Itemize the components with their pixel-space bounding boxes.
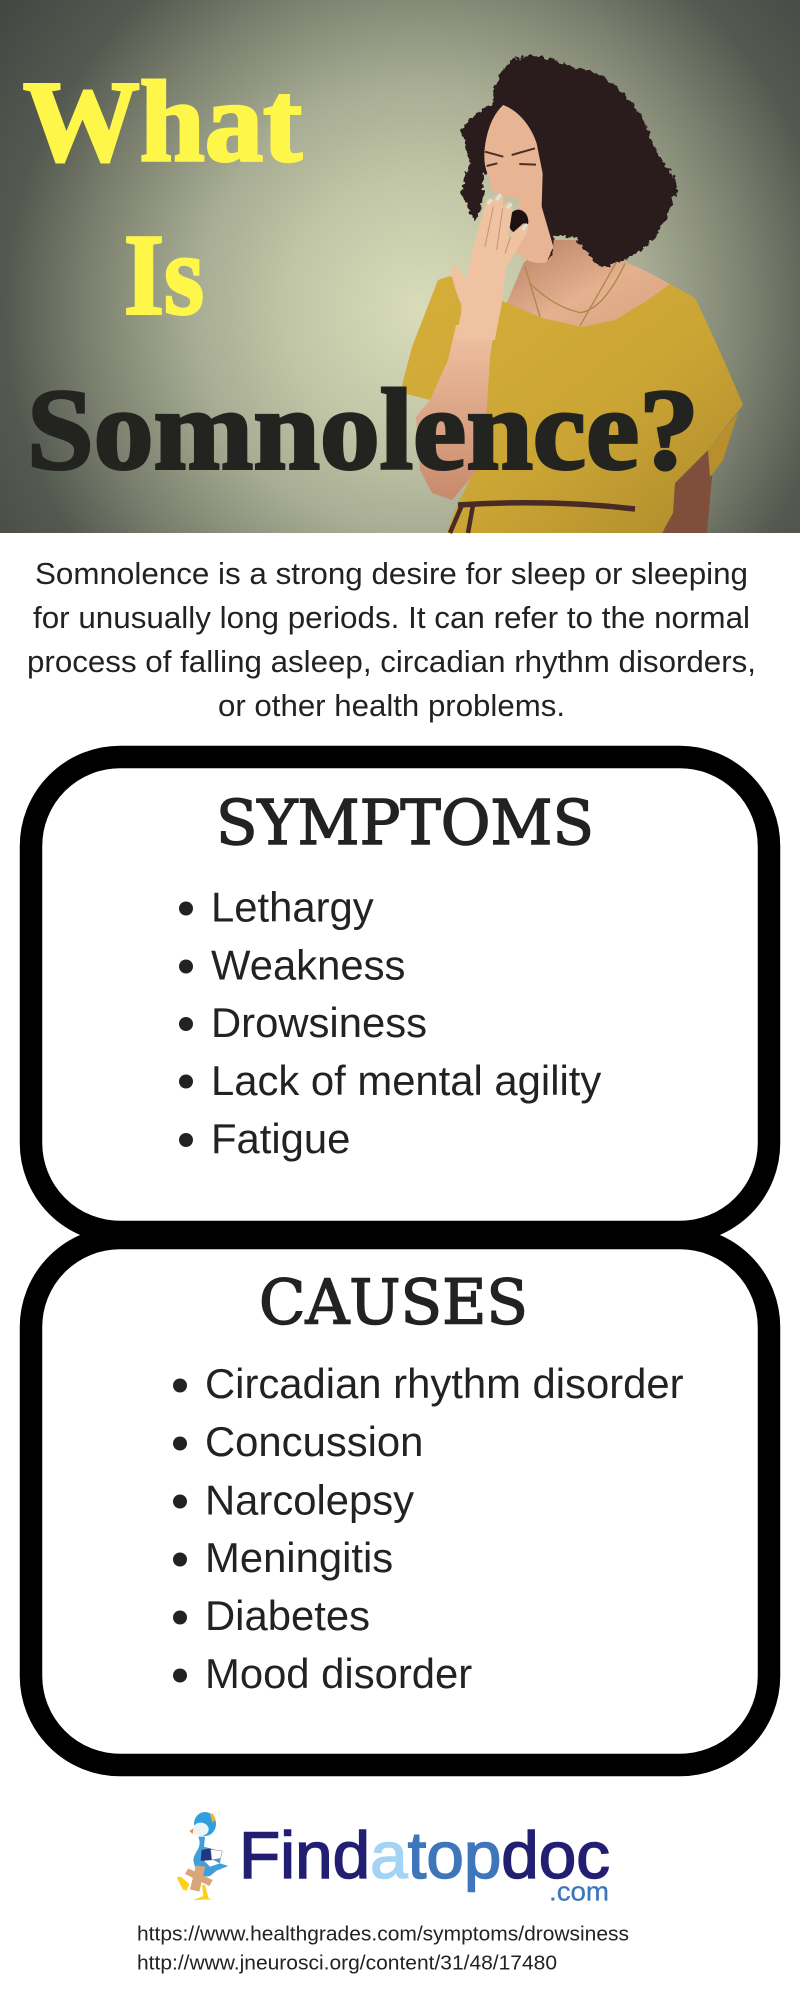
list of symptoms: Weakness (211, 942, 405, 988)
source links: https://www.healthgrades.com/symptoms/drowsiness (137, 1924, 629, 1946)
list of symptoms: Drowsiness (211, 999, 427, 1046)
logo: Findatopdoc (177, 1812, 610, 1906)
icon: duck mascot (177, 1812, 228, 1900)
causes box (31, 1238, 769, 1765)
right arm (663, 450, 712, 533)
list of causes: Mood disorder (205, 1650, 472, 1697)
intro paragraph (27, 556, 756, 723)
symptoms box (31, 757, 769, 1232)
wordmark suffix: .com (549, 1876, 609, 1906)
intro paragraph: Somnolence is a strong desire for sleep or sleeping (35, 556, 748, 591)
wordmark: Findatopdoc (239, 1818, 610, 1892)
title: What: What (23, 58, 302, 186)
list of causes: Meningitis (205, 1534, 393, 1581)
panel: header photo (0, 0, 800, 533)
intro paragraph: for unusually long periods. It can refer to the normal (33, 600, 750, 635)
panel: symptoms (31, 757, 769, 1232)
necklace (525, 262, 625, 326)
neck and chest (507, 240, 670, 327)
title: Somnolence?: Somnolence? (27, 366, 699, 494)
list of causes (173, 1360, 684, 1697)
list of causes: Narcolepsy (205, 1476, 414, 1524)
list of causes: Concussion (205, 1418, 423, 1465)
face (484, 105, 553, 263)
list of symptoms: Lethargy (211, 884, 374, 930)
hand (451, 194, 528, 340)
source links (137, 1924, 629, 1974)
closed eyes and brows (485, 148, 536, 166)
heading: causes: CAUSES (259, 1266, 528, 1338)
panel: causes (31, 1238, 769, 1765)
list of symptoms: Fatigue (211, 1115, 350, 1162)
list of causes: Circadian rhythm disorder (205, 1360, 684, 1407)
list of causes: Diabetes (205, 1592, 370, 1639)
title: Is: Is (124, 212, 204, 340)
hair (460, 55, 677, 267)
belt (458, 503, 635, 509)
photo background wall (0, 0, 800, 533)
list of symptoms (179, 884, 601, 1162)
illustration: yawning woman (402, 55, 743, 533)
intro paragraph: or other health problems. (218, 688, 565, 723)
mouth (508, 210, 528, 234)
back of sleeve (708, 413, 738, 477)
intro paragraph: process of falling asleep, circadian rhythm disorders, (27, 644, 756, 679)
heading: symptoms: SYMPTOMS (216, 786, 594, 859)
raised arm (416, 325, 495, 500)
shirt (402, 276, 743, 533)
list of symptoms: Lack of mental agility (211, 1057, 601, 1104)
source links: http://www.jneurosci.org/content/31/48/17480 (137, 1952, 557, 1974)
